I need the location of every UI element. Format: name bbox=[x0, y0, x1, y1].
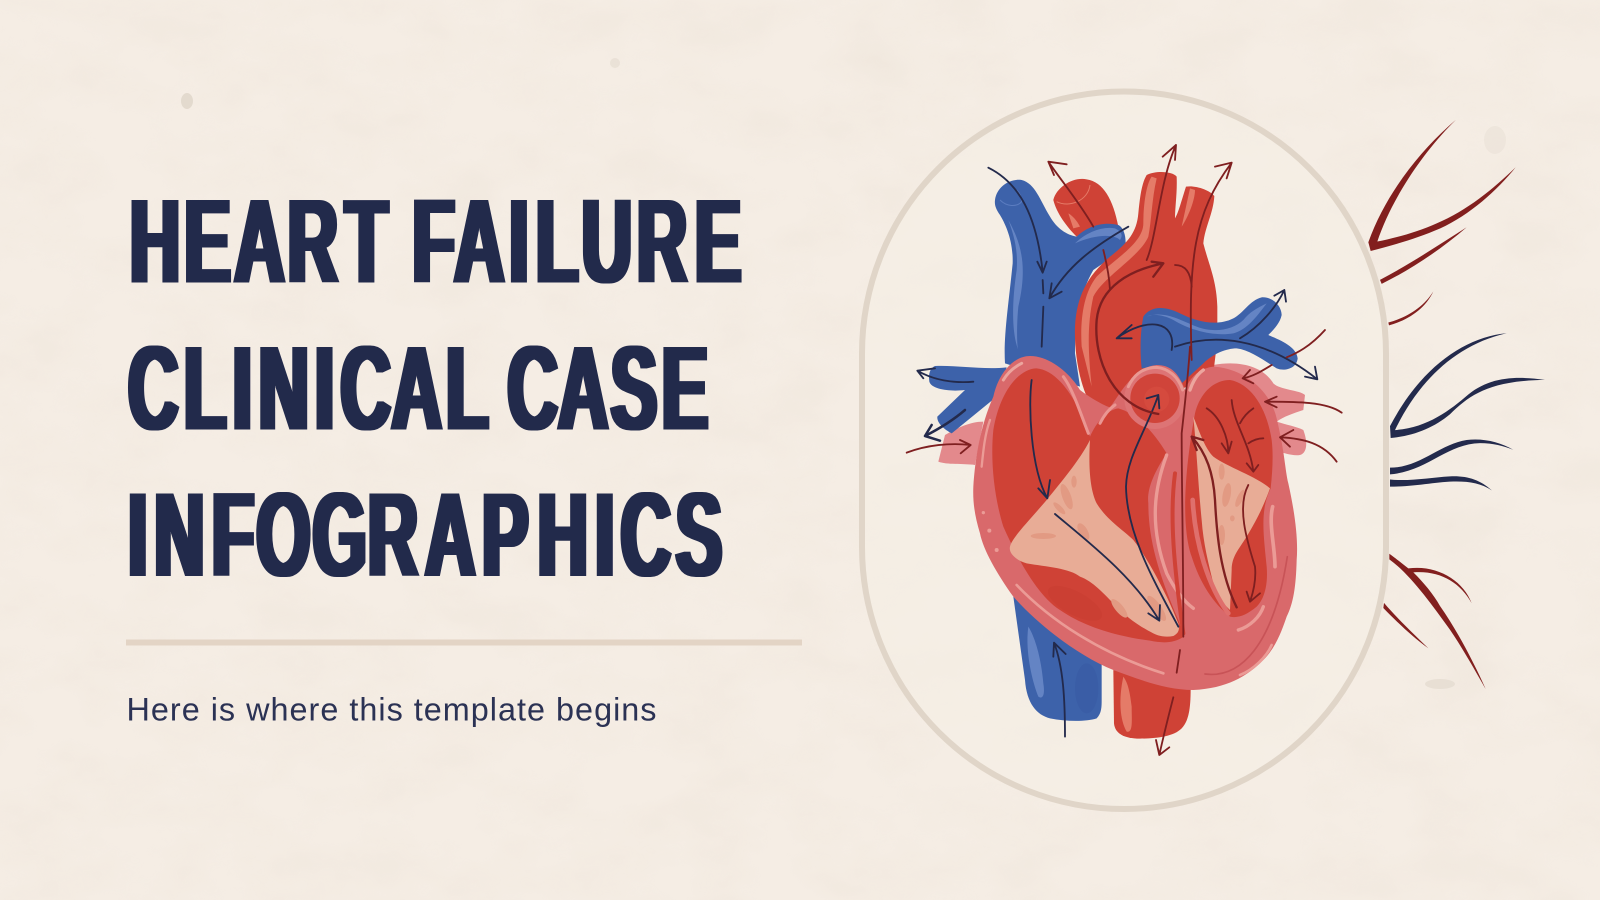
veins: upper red bbox=[1368, 120, 1516, 325]
divider line bbox=[126, 640, 802, 646]
descending aorta bbox=[1113, 670, 1191, 739]
pink atria behind heart bbox=[938, 363, 1306, 465]
superior vena cava bbox=[995, 180, 1126, 387]
title: HEART FAILURE bbox=[130, 174, 741, 308]
aortic valve ring bbox=[1124, 367, 1186, 429]
title: INFOGRAPHICS bbox=[128, 467, 722, 602]
rounded pill frame around heart bbox=[862, 92, 1386, 809]
title: CLINICAL CASE bbox=[128, 320, 708, 455]
subtitle: Here is where this template begins bbox=[126, 692, 658, 728]
navy flow arrows bbox=[917, 168, 1317, 737]
title bbox=[128, 174, 741, 602]
veins: lower red bbox=[1383, 554, 1486, 689]
upper back artery bbox=[1053, 179, 1118, 237]
left chamber valve bbox=[1010, 440, 1179, 637]
left blue branches bbox=[929, 366, 1007, 433]
heart body bbox=[973, 356, 1297, 690]
anatomical heart illustration bbox=[907, 145, 1342, 755]
right chamber valve bbox=[1193, 417, 1270, 610]
septum streaks and body highlights bbox=[982, 363, 1287, 675]
aorta bbox=[1075, 172, 1217, 413]
left chamber bbox=[992, 368, 1184, 642]
right chamber bbox=[1185, 380, 1273, 617]
pulmonary vessel, blue bbox=[1141, 297, 1298, 383]
decorative veins on the right bbox=[1368, 120, 1545, 689]
inferior vena cava bbox=[1013, 597, 1102, 721]
veins: navy bbox=[1390, 333, 1545, 491]
red flow arrows bbox=[907, 145, 1342, 755]
